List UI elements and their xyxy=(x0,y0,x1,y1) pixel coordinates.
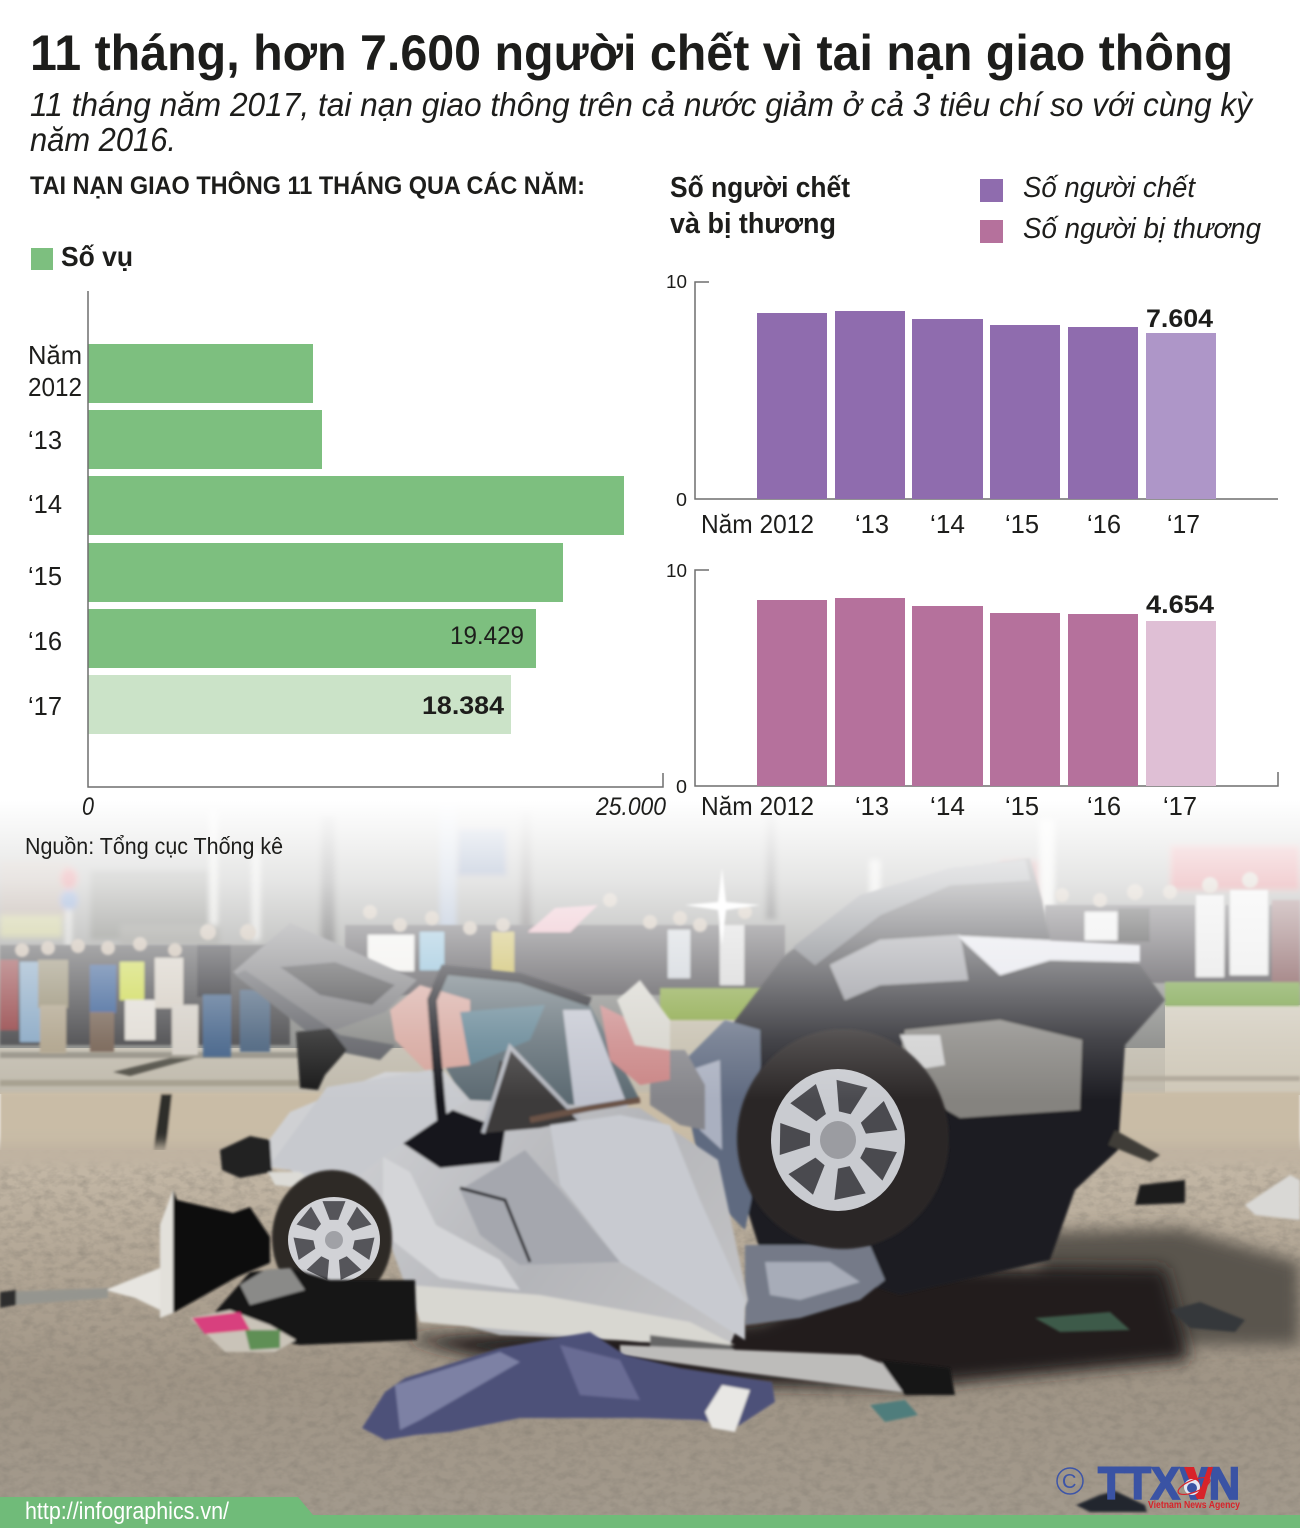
axes xyxy=(695,570,1278,786)
subtitle: 11 tháng năm 2017, tai nạn giao thông trên cả nước giảm ở cả 3 tiêu chí so với cùng kỳ xyxy=(30,86,1254,123)
axis values: 10 xyxy=(666,272,687,292)
value label: 7.604 xyxy=(1146,305,1213,333)
axis values: 0 xyxy=(676,490,687,510)
photo: green hedge xyxy=(660,982,1300,1020)
year labels: Năm 2012 xyxy=(701,509,814,539)
axis values: 0 xyxy=(82,793,94,821)
copyright mark: C xyxy=(1062,1471,1076,1493)
value label: 4.654 xyxy=(1146,591,1214,619)
chart heading: TAI NẠN GIAO THÔNG 11 THÁNG QUA CÁC NĂM: xyxy=(30,170,585,200)
chart: deaths xyxy=(666,272,1278,539)
year labels xyxy=(701,791,1197,821)
photo: upside-down car, dark wreck xyxy=(650,858,1300,1325)
photo: blue tarp on the road xyxy=(362,1332,775,1440)
photo: small front wheel xyxy=(272,1170,392,1306)
value labels xyxy=(422,622,524,720)
axis values: 0 xyxy=(676,777,687,797)
photo: crowd of onlookers xyxy=(0,890,1300,1057)
year labels: ‘16 xyxy=(28,626,62,656)
axis values xyxy=(82,793,666,821)
year labels: Năm xyxy=(28,340,82,370)
value labels: 19.429 xyxy=(450,622,524,650)
year labels: ‘15 xyxy=(1005,791,1039,821)
value labels: 18.384 xyxy=(422,692,504,720)
title: 11 tháng, hơn 7.600 người chết vì tai nạn giao thông xyxy=(30,25,1233,81)
photo: crushed silver car body xyxy=(220,970,955,1395)
year labels xyxy=(28,340,82,721)
panel heading: deaths and injuries: Số người chết xyxy=(670,172,850,204)
footer band with website tab xyxy=(0,1497,1300,1528)
copyright mark xyxy=(1057,1468,1083,1494)
photo: soft kerb between barrier and road xyxy=(0,1144,1300,1166)
photo: road texture xyxy=(0,1150,1300,1528)
year labels: ‘17 xyxy=(1163,791,1197,821)
year labels: ‘17 xyxy=(1167,509,1200,539)
year labels: ‘15 xyxy=(1005,509,1039,539)
year labels xyxy=(701,509,1200,539)
bars xyxy=(757,598,1216,786)
year labels: ‘15 xyxy=(28,561,62,591)
axis values xyxy=(666,272,687,510)
legend: deaths and injuries xyxy=(980,172,1261,245)
legend: number of accidents xyxy=(31,241,133,272)
photo: wrecked car on the road xyxy=(0,700,1300,1528)
year labels: ‘16 xyxy=(1087,509,1121,539)
legend: number of accidents: Số vụ xyxy=(61,241,133,272)
year labels: 2012 xyxy=(28,372,82,402)
photo: background trees and buildings xyxy=(0,800,1300,1060)
panel heading: deaths and injuries: và bị thương xyxy=(670,208,836,240)
legend: deaths and injuries: Số người bị thương xyxy=(1023,213,1261,245)
red V and globe xyxy=(1176,1467,1213,1499)
photo: concrete barrier xyxy=(0,1052,1300,1160)
photo: large upturned wheel xyxy=(737,1029,949,1249)
panel heading: deaths and injuries xyxy=(670,172,850,240)
legend: deaths and injuries: Số người chết xyxy=(1023,172,1197,204)
photo: crushed roof panel xyxy=(233,923,417,1090)
photo: long shadow under the cars xyxy=(400,1228,1300,1388)
year labels: ‘13 xyxy=(28,425,62,455)
subtitle: năm 2016. xyxy=(30,121,176,158)
year labels: ‘17 xyxy=(28,691,62,721)
wordmark: TTXVN xyxy=(1098,1458,1240,1509)
source note: Nguồn: Tổng cục Thống kê xyxy=(25,833,283,859)
logo shadow blot xyxy=(1076,1491,1147,1512)
axes xyxy=(695,282,1278,499)
axes xyxy=(88,291,663,787)
photo: onlookers' heads xyxy=(15,872,1258,957)
photo: front bumper xyxy=(0,1190,270,1318)
year labels: Năm 2012 xyxy=(701,791,814,821)
agency tagline: Vietnam News Agency xyxy=(1148,1500,1240,1511)
year labels: ‘14 xyxy=(930,791,965,821)
year labels: ‘13 xyxy=(855,791,889,821)
panel: accidents bar chart xyxy=(28,170,666,821)
bars xyxy=(757,311,1216,499)
axis values xyxy=(666,561,687,797)
horizontal bars xyxy=(88,344,624,734)
year labels: ‘13 xyxy=(855,509,889,539)
subtitle xyxy=(30,86,1254,158)
photo: road surface xyxy=(0,1150,1300,1528)
chart: injuries xyxy=(666,561,1278,821)
axis values: 10 xyxy=(666,561,687,581)
year labels: ‘16 xyxy=(1087,791,1121,821)
logo: TTXVN xyxy=(1057,1458,1240,1512)
year labels: ‘14 xyxy=(930,509,965,539)
axis values: 25.000 xyxy=(595,793,666,821)
website url: http://infographics.vn/ xyxy=(25,1498,229,1525)
photo: sidewalk xyxy=(0,1005,1300,1095)
photo: sun glint xyxy=(685,868,760,945)
photo: white haze fading into the page xyxy=(0,700,1300,1100)
year labels: ‘14 xyxy=(28,489,62,519)
photo: debris and tyre under the front xyxy=(190,1268,1245,1422)
